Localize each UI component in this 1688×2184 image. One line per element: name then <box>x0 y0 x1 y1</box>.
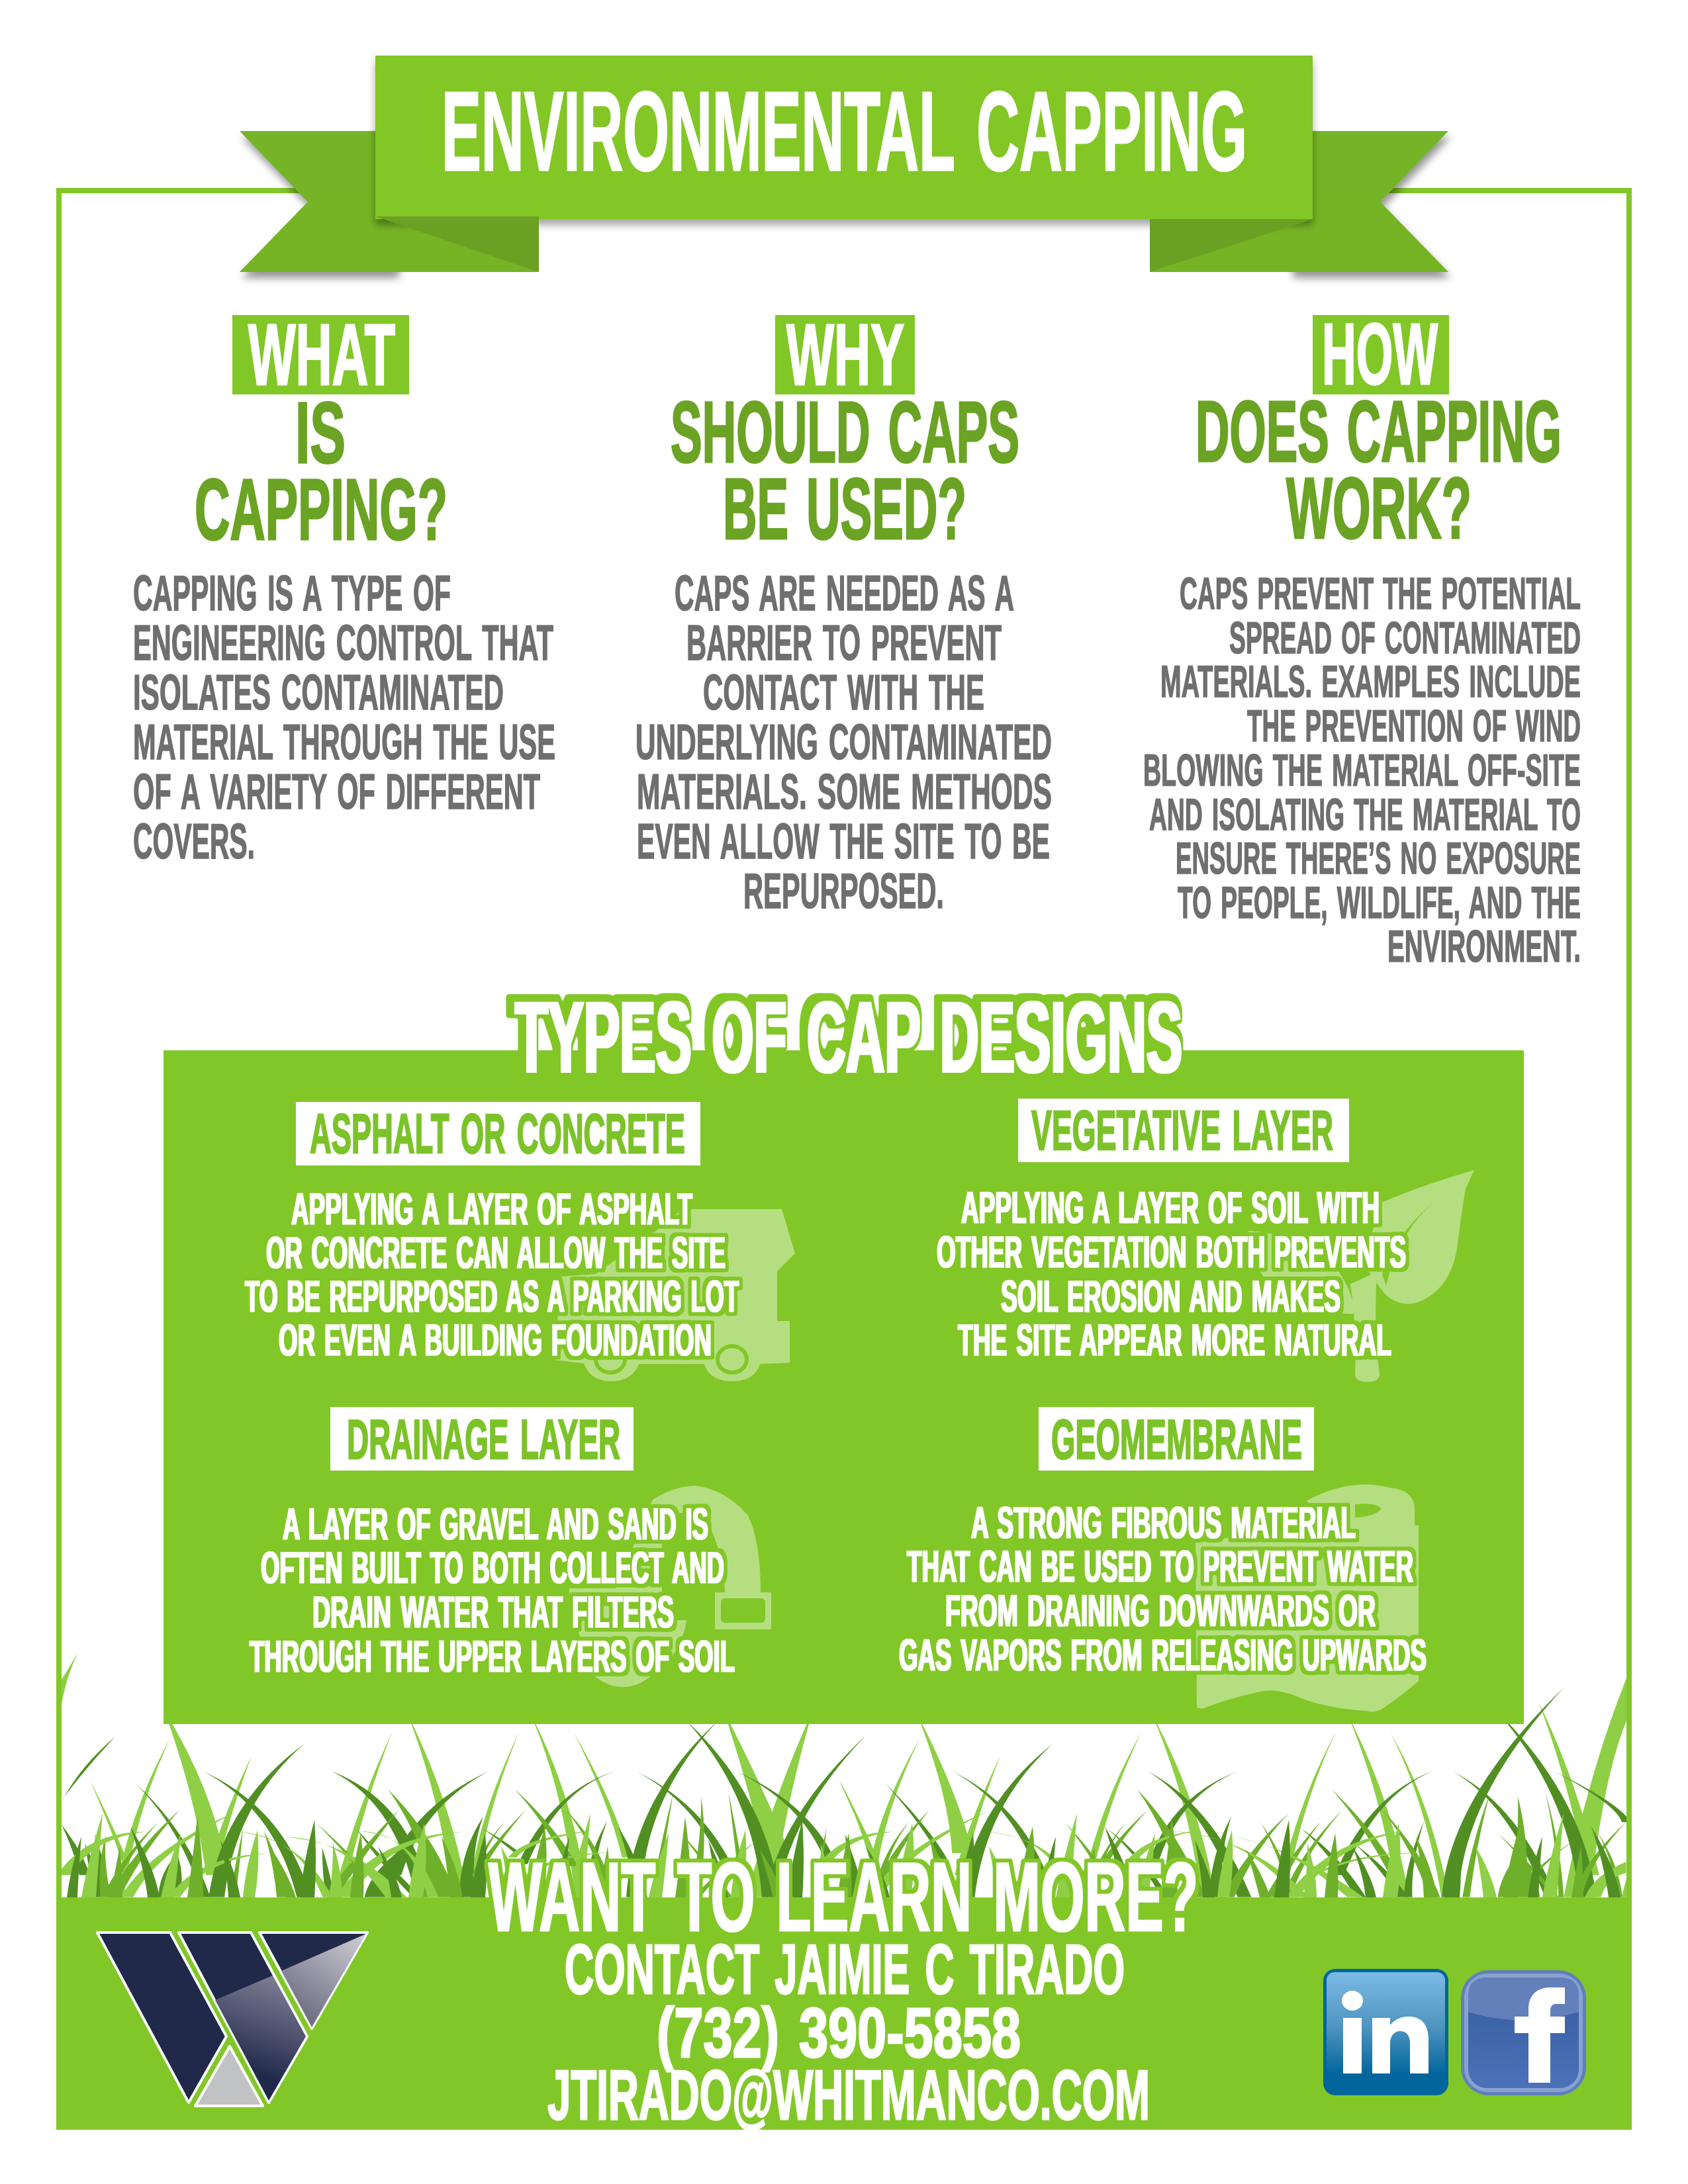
logo right highlight <box>281 1934 366 2027</box>
body text: why: CONTACT WITH THE <box>703 664 984 720</box>
icon: leaf vein <box>1382 1198 1439 1286</box>
body text: what is capping: CAPPING IS A TYPE OF <box>133 565 451 621</box>
ribbon right tail <box>1291 131 1448 272</box>
card label: ASPHALT OR CONCRETE <box>310 1103 685 1165</box>
heading: should caps: SHOULD CAPS <box>671 383 1019 480</box>
grass illustration <box>57 1653 1688 1897</box>
card text: A LAYER OF GRAVEL AND SAND IS <box>283 1499 708 1549</box>
heading: be used: BE USED? <box>723 460 966 557</box>
facebook face <box>1468 1978 1579 2088</box>
ribbon main band <box>375 56 1313 219</box>
card label: DRAINAGE LAYER <box>347 1408 620 1471</box>
body text: why: EVEN ALLOW THE SITE TO BE <box>637 813 1050 869</box>
grass base tufts <box>67 1813 1688 1897</box>
truck rear wheel ring <box>596 1346 625 1373</box>
heading: is: IS <box>295 384 346 481</box>
body text: why: MATERIALS. SOME METHODS <box>637 764 1052 819</box>
truck silhouette <box>555 1209 795 1381</box>
column: what is capping <box>133 306 555 869</box>
ribbon right tail lower <box>1150 202 1448 272</box>
facebook outer tile <box>1461 1970 1586 2095</box>
card text: A STRONG FIBROUS MATERIAL <box>971 1498 1356 1548</box>
linkedin letter i stem <box>1343 2018 1362 2073</box>
phone number: (732) 390-5858 <box>657 1994 1021 2072</box>
card text: THROUGH THE UPPER LAYERS OF SOIL <box>250 1631 735 1682</box>
body text: why <box>635 565 1052 919</box>
card text: OR CONCRETE CAN ALLOW THE SITE <box>266 1228 726 1278</box>
facebook letter f <box>1515 1987 1565 2083</box>
facebook light ring <box>1464 1974 1583 2092</box>
logo triangle <box>195 2046 263 2106</box>
icon: pipe flange opening <box>721 1598 765 1623</box>
icon: linkedin <box>1323 1969 1448 2095</box>
card text: TO BE REPURPOSED AS A PARKING LOT <box>245 1271 739 1322</box>
card text <box>250 1499 735 1682</box>
card text <box>899 1498 1427 1680</box>
card text: DRAIN WATER THAT FILTERS <box>312 1587 674 1637</box>
heading: what: WHAT <box>248 306 395 403</box>
body text: what is capping <box>133 565 555 869</box>
body text: why: CAPS ARE NEEDED AS A <box>675 565 1014 621</box>
body text: what is capping: COVERS. <box>133 813 255 869</box>
body text: why: BARRIER TO PREVENT <box>686 615 1002 670</box>
card label box <box>1039 1407 1314 1471</box>
card text: SOIL EROSION AND MAKES <box>1001 1271 1340 1322</box>
body text: what is capping: ENGINEERING CONTROL THAT <box>133 615 553 670</box>
card: asphalt or concrete <box>245 1102 739 1365</box>
grass right half <box>812 1678 1630 1897</box>
heading: why: WHY <box>786 306 904 403</box>
ribbon right fold <box>1150 219 1313 272</box>
logo right piece <box>259 1933 367 2028</box>
linkedin tile <box>1323 1969 1448 2095</box>
linkedin gradient face <box>1327 1972 1445 2092</box>
heading box: how <box>1313 315 1449 394</box>
card label box <box>330 1407 633 1471</box>
card label: GEOMEMBRANE <box>1051 1408 1302 1471</box>
contact name: CONTACT JAIMIE C TIRADO <box>565 1931 1125 2009</box>
body text: what is capping: ISOLATES CONTAMINATED <box>133 664 504 720</box>
card label: VEGETATIVE LAYER <box>1031 1099 1333 1161</box>
footer band <box>56 1897 1632 2130</box>
heading box: why <box>775 315 915 394</box>
heading box: what <box>232 315 409 394</box>
card: drainage layer <box>250 1407 735 1682</box>
linkedin letter n <box>1372 2017 1429 2073</box>
logo <box>97 1933 367 2106</box>
icon: drain pipe <box>569 1486 771 1687</box>
body text: how <box>1143 569 1581 972</box>
ribbon left tail <box>240 131 397 272</box>
panel background <box>164 1050 1524 1724</box>
logo middle highlight <box>215 1976 306 2101</box>
footer contact text <box>489 1841 1198 2134</box>
icon: leaf sprout <box>1248 1170 1474 1382</box>
logo middle piece <box>179 1933 307 2103</box>
logo left piece <box>97 1933 226 2103</box>
icon: facebook <box>1461 1970 1586 2095</box>
body text: what is capping: OF A VARIETY OF DIFFERENT <box>133 764 540 819</box>
card: geomembrane <box>899 1407 1427 1680</box>
title ribbon <box>240 56 1448 272</box>
panel: types of cap designs <box>164 981 1524 1724</box>
card text <box>245 1184 739 1365</box>
email: JTIRADO@WHITMANCO.COM <box>547 2056 1150 2134</box>
body text: what is capping: MATERIAL THROUGH THE USE <box>133 714 555 770</box>
icon: roll slit <box>1355 1504 1382 1518</box>
card: vegetative layer <box>937 1099 1406 1365</box>
heading: work: WORK? <box>1286 459 1472 557</box>
card label box <box>296 1102 700 1165</box>
card text: OR EVEN A BUILDING FOUNDATION <box>279 1315 712 1365</box>
heading: how: HOW <box>1322 305 1438 402</box>
icon: concrete truck <box>555 1209 795 1381</box>
icon: geomembrane roll <box>1196 1484 1419 1711</box>
page frame <box>59 191 1629 1919</box>
card label box <box>1018 1099 1349 1162</box>
heading: capping: CAPPING? <box>195 461 447 558</box>
ribbon left fold <box>375 216 539 272</box>
card text: APPLYING A LAYER OF ASPHALT <box>291 1184 692 1234</box>
body text: why: UNDERLYING CONTAMINATED <box>635 714 1052 770</box>
ribbon left tail lower <box>240 202 539 272</box>
facebook gloss <box>1468 1978 1579 2020</box>
linkedin letter i dot <box>1342 1991 1363 2011</box>
column: how does capping work <box>1143 305 1581 972</box>
card text: OFTEN BUILT TO BOTH COLLECT AND <box>261 1543 724 1593</box>
body text: why: REPURPOSED. <box>743 863 944 919</box>
truck front wheel ring <box>718 1346 747 1373</box>
grass left half <box>57 1653 880 1897</box>
card text <box>937 1183 1406 1365</box>
column: why should caps be used <box>635 306 1052 919</box>
